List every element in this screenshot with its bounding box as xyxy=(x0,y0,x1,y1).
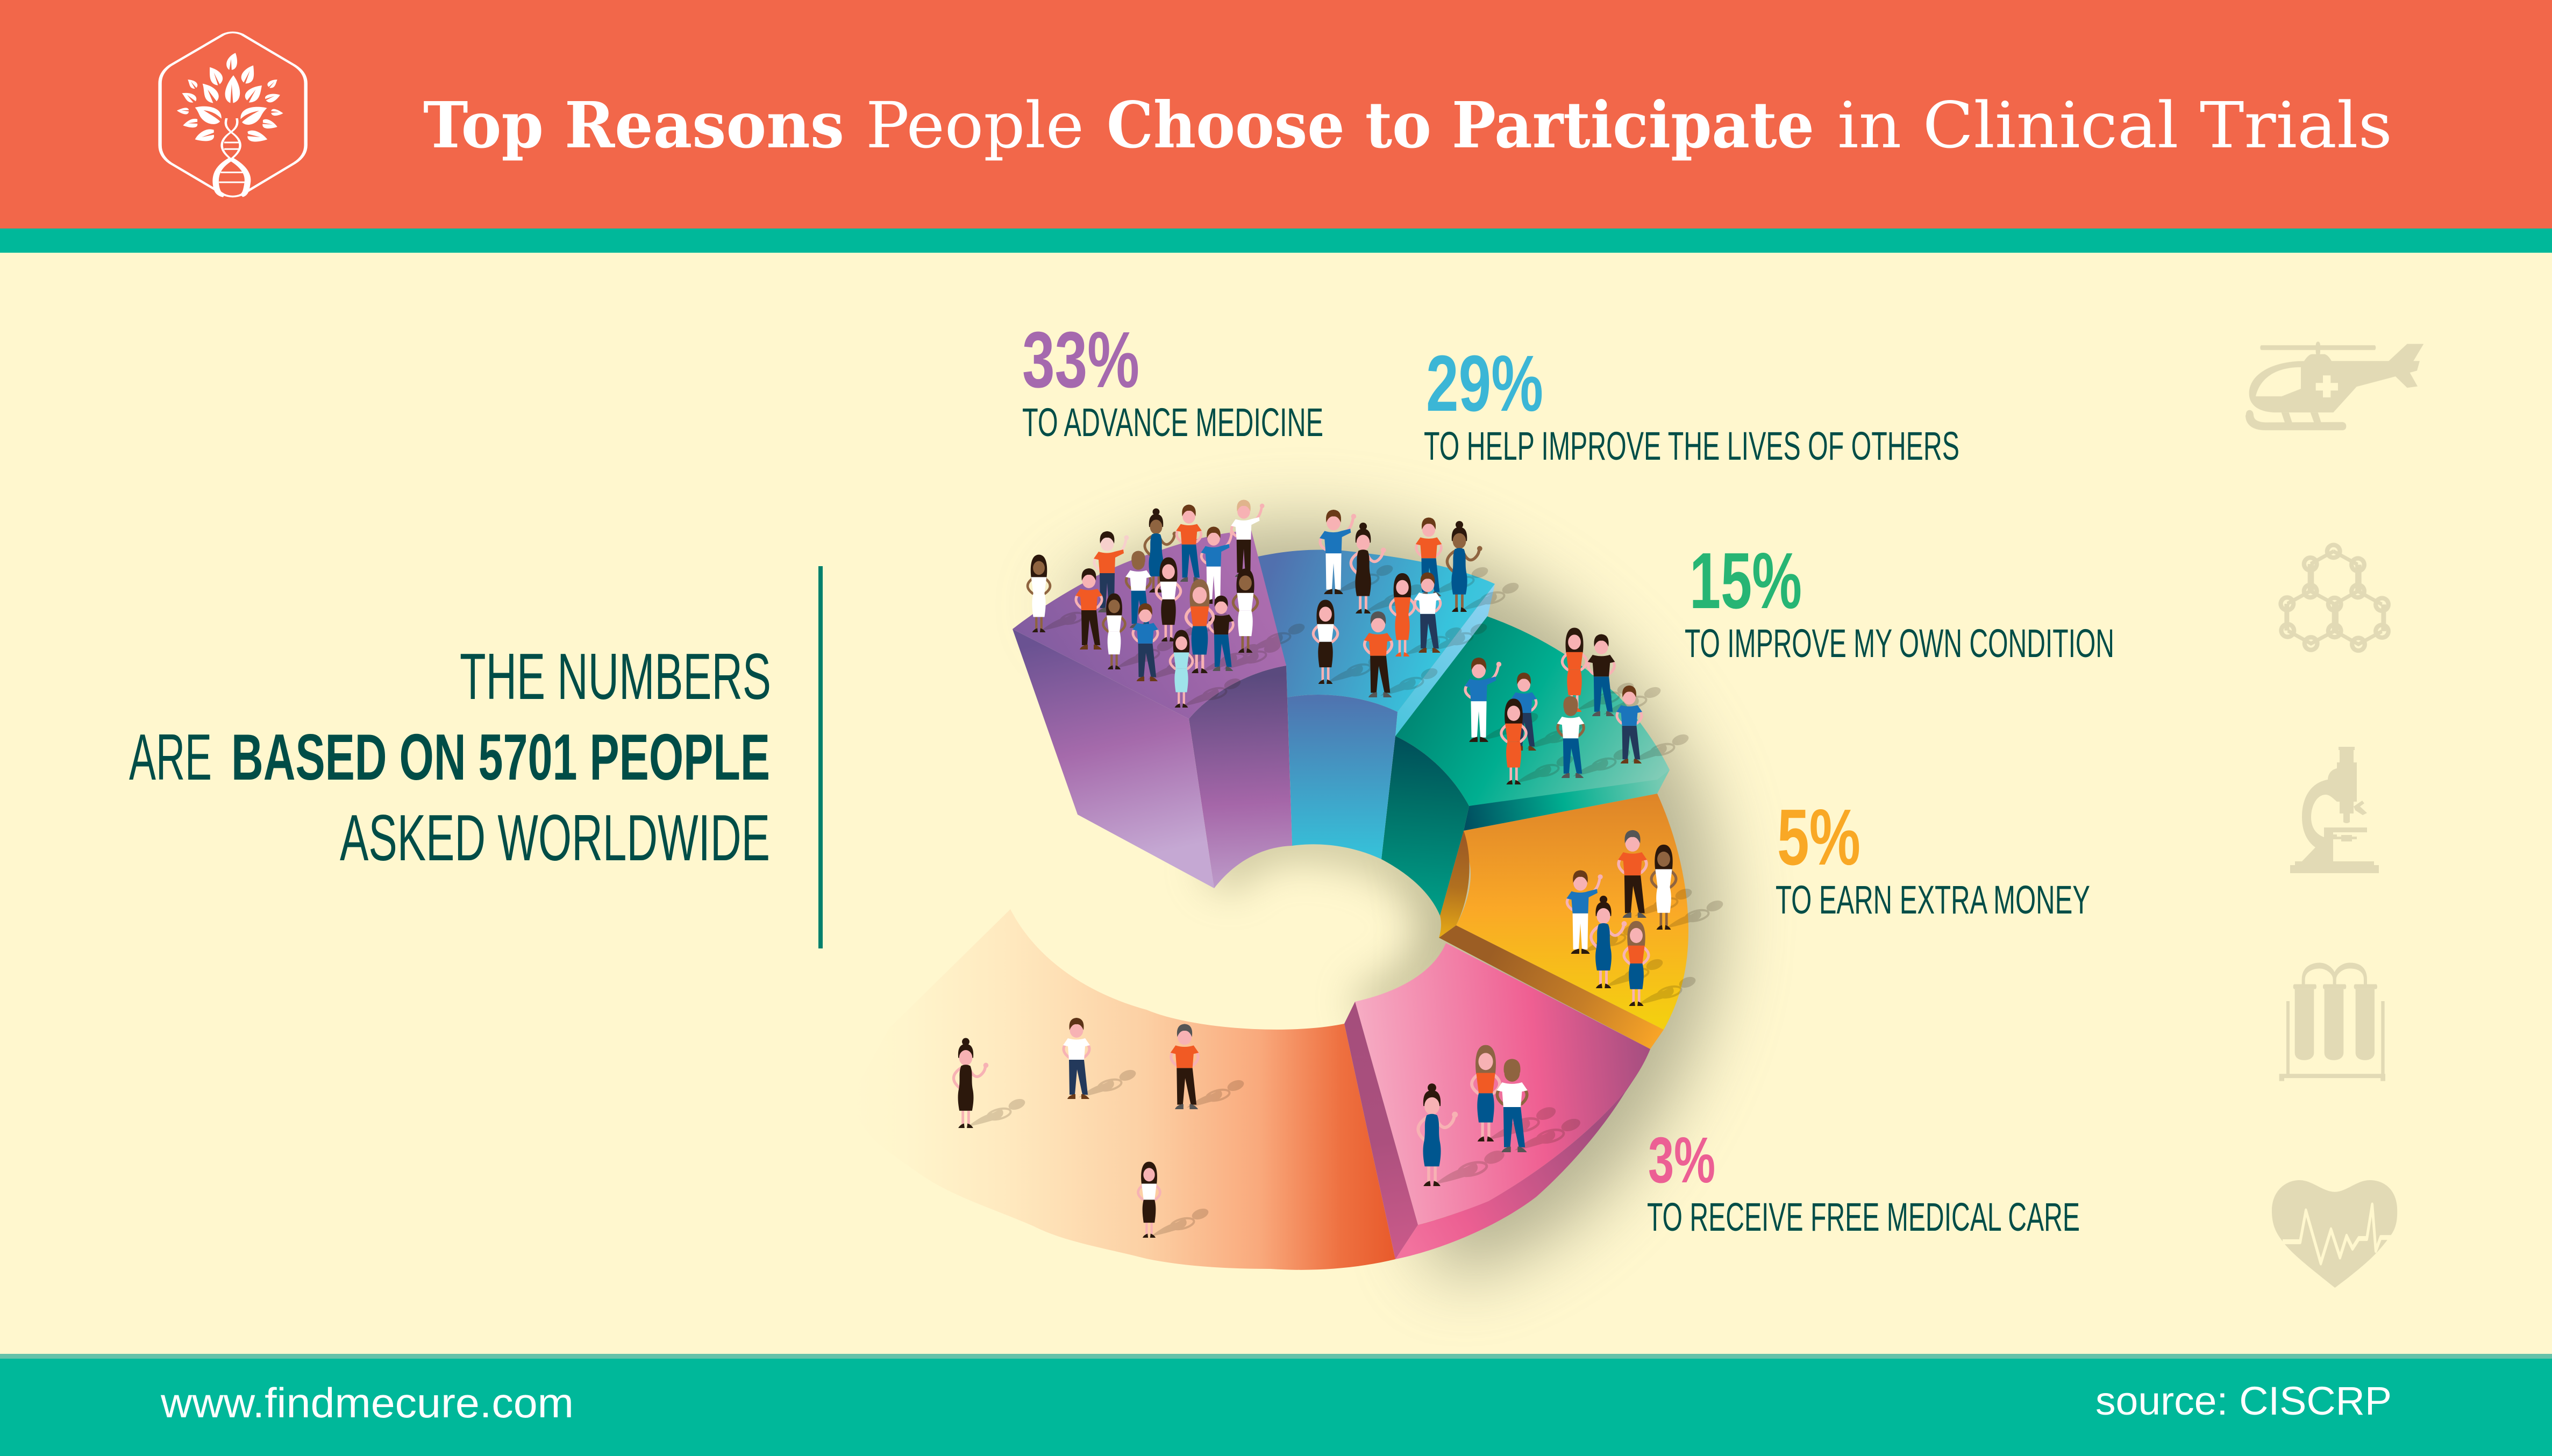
people on the 29 percent slice xyxy=(1313,510,1520,697)
people on the 33 percent slice xyxy=(1028,500,1306,708)
label: 29 percent: TO HELP IMPROVE THE LIVES OF OTHERS xyxy=(1424,424,1959,468)
title: in Clinical Trials xyxy=(1837,88,2392,162)
divider line xyxy=(818,566,823,948)
icon: microscope xyxy=(2290,747,2379,873)
icon: molecule xyxy=(2278,543,2391,653)
label: 15 percent xyxy=(1685,537,2114,666)
label: 5 percent xyxy=(1776,793,2090,922)
label: 5 percent: 5% xyxy=(1777,793,1860,882)
footer band xyxy=(0,1354,2552,1456)
footer website: www.findmecure.com xyxy=(160,1379,574,1426)
slice: 5 percent xyxy=(1439,794,1688,1049)
label: 33 percent: 33% xyxy=(1022,316,1139,404)
hole shading xyxy=(1216,839,1444,1011)
footer source: source: CISCRP xyxy=(2095,1379,2392,1423)
label: 33 percent: TO ADVANCE MEDICINE xyxy=(1022,400,1323,445)
people on the 3 percent slice xyxy=(1418,1045,1582,1186)
label: 3 percent: 3% xyxy=(1648,1123,1715,1196)
intro text block: ASKED WORLDWIDE xyxy=(340,801,770,874)
label: 33 percent xyxy=(1022,316,1323,445)
intro text block xyxy=(129,640,771,874)
icon: heart with pulse line xyxy=(2272,1180,2397,1288)
icon: medical helicopter xyxy=(2246,342,2423,430)
people on the peach slice xyxy=(954,1018,1245,1238)
people on the 5 percent slice xyxy=(1566,830,1724,1006)
title: Top Reasons xyxy=(423,88,844,162)
label: 3 percent xyxy=(1647,1123,2080,1239)
slice: 29 percent xyxy=(1253,550,1495,859)
outer shadow xyxy=(1054,524,1719,1277)
icon: test tubes xyxy=(2279,966,2385,1081)
title xyxy=(423,88,2392,162)
slice: peach remainder xyxy=(854,909,1395,1270)
header band xyxy=(0,0,2552,229)
intro text block: ARE xyxy=(129,720,212,794)
header teal stripe xyxy=(0,229,2552,253)
label: 29 percent xyxy=(1424,339,1959,468)
intro text block: BASED ON 5701 PEOPLE xyxy=(231,720,770,794)
label: 15 percent: TO IMPROVE MY OWN CONDITION xyxy=(1685,621,2114,666)
logo: tree and DNA in a hexagon xyxy=(160,32,306,196)
title: Choose to Participate xyxy=(1107,88,1814,162)
label: 29 percent: 29% xyxy=(1426,339,1543,428)
title: People xyxy=(866,88,1084,162)
donut chart: cast shadows and slices xyxy=(854,524,1719,1277)
label: 5 percent: TO EARN EXTRA MONEY xyxy=(1776,877,2090,922)
intro text block: THE NUMBERS xyxy=(460,640,771,713)
slice: 15 percent xyxy=(1381,616,1670,916)
label: 3 percent: TO RECEIVE FREE MEDICAL CARE xyxy=(1647,1195,2080,1239)
label: 15 percent: 15% xyxy=(1690,537,1802,625)
slice: 3 percent xyxy=(1344,943,1650,1259)
people on the 15 percent slice xyxy=(1465,627,1690,784)
slice: 33 percent xyxy=(1013,530,1292,888)
